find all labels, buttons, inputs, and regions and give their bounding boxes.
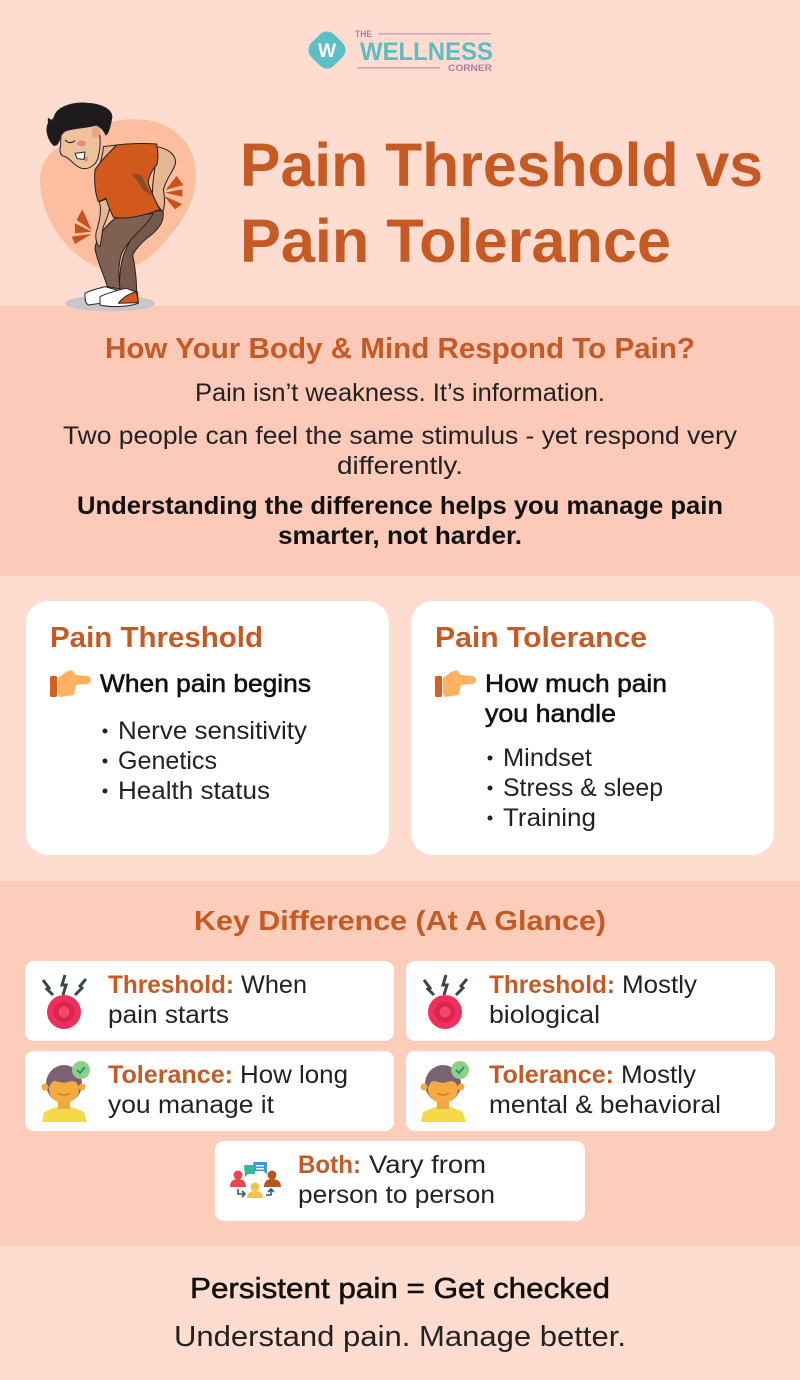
card text: Threshold: (108, 971, 234, 999)
card: both vary (215, 1141, 585, 1221)
illustration: man bending over in pain (40, 103, 196, 311)
card text: Vary from (369, 1151, 486, 1179)
card text (489, 1061, 721, 1119)
footer callout: Persistent pain = Get checked (190, 1273, 610, 1305)
card: tolerance mostly mental (406, 1051, 775, 1131)
card text (489, 971, 698, 1029)
card text: Threshold: (489, 971, 615, 999)
card text (108, 971, 307, 1029)
title: Pain Threshold vs (240, 131, 763, 199)
card text: Mostly (621, 1061, 697, 1089)
footer tagline: Understand pain. Manage better. (174, 1321, 626, 1353)
subheading: when pain begins: When pain begins (100, 670, 311, 698)
icon: pain target (43, 975, 86, 1029)
card text (298, 1151, 495, 1209)
threshold factors list: Health status (118, 777, 270, 805)
card text: mental & behavioral (489, 1091, 721, 1119)
card text: Mostly (622, 971, 698, 999)
threshold factors list (102, 717, 308, 805)
tolerance factors list: Mindset (503, 744, 592, 772)
intro text (63, 379, 738, 480)
tolerance factors list: Stress & sleep (503, 774, 663, 802)
intro text: differently. (337, 452, 463, 480)
logo: The Wellness Corner: WELLNESS (360, 38, 493, 66)
card: tolerance how long (25, 1051, 394, 1131)
card text: person to person (298, 1181, 495, 1209)
title (240, 131, 763, 275)
threshold factors list: Nerve sensitivity (118, 717, 308, 745)
subheading: how much pain you handle (485, 670, 667, 728)
heading: pain tolerance: Pain Tolerance (435, 622, 647, 654)
heading: key difference: Key Difference (At A Glance) (194, 905, 606, 936)
icon: calm person with check (42, 1061, 90, 1122)
card text: When (241, 971, 307, 999)
intro bold statement: smarter, not harder. (278, 522, 522, 550)
card text: biological (489, 1001, 600, 1029)
icon: pointing hand (435, 670, 476, 697)
card text (108, 1061, 348, 1119)
logo: The Wellness Corner (304, 27, 493, 73)
panel: pain tolerance (411, 601, 774, 855)
card text: pain starts (108, 1001, 229, 1029)
card text: Both: (298, 1151, 361, 1179)
icon: people talking (230, 1162, 281, 1198)
icon: calm person with check (420, 1061, 469, 1122)
intro heading: How Your Body & Mind Respond To Pain? (105, 333, 695, 365)
intro bold statement: Understanding the difference helps you manage pain (77, 492, 723, 520)
footer (174, 1273, 626, 1353)
logo: The Wellness Corner: CORNER (448, 63, 493, 73)
intro text: Pain isn’t weakness. It’s information. (195, 379, 605, 407)
card text: Tolerance: (108, 1061, 233, 1089)
card: threshold mostly biological (406, 961, 775, 1041)
logo: The Wellness Corner: W (318, 41, 336, 62)
tolerance factors list: Training (503, 804, 596, 832)
card: threshold when pain starts (25, 961, 394, 1041)
card text: How long (240, 1061, 348, 1089)
intro text: Two people can feel the same stimulus - yet respond very (63, 422, 738, 450)
intro bold statement (77, 492, 723, 550)
tolerance factors list (488, 744, 663, 832)
subheading: how much pain you handle: you handle (485, 700, 616, 728)
panel: intro (63, 333, 738, 550)
subheading: how much pain you handle: How much pain (485, 670, 667, 698)
threshold factors list: Genetics (118, 747, 217, 775)
title: Pain Tolerance (240, 207, 671, 275)
heading: pain threshold: Pain Threshold (50, 622, 263, 654)
logo: The Wellness Corner: THE (355, 29, 372, 39)
card text: Tolerance: (489, 1061, 614, 1089)
panel: pain threshold (26, 601, 389, 855)
icon: pointing hand (50, 670, 91, 697)
card text: you manage it (108, 1091, 274, 1119)
icon: pain target (424, 975, 467, 1029)
